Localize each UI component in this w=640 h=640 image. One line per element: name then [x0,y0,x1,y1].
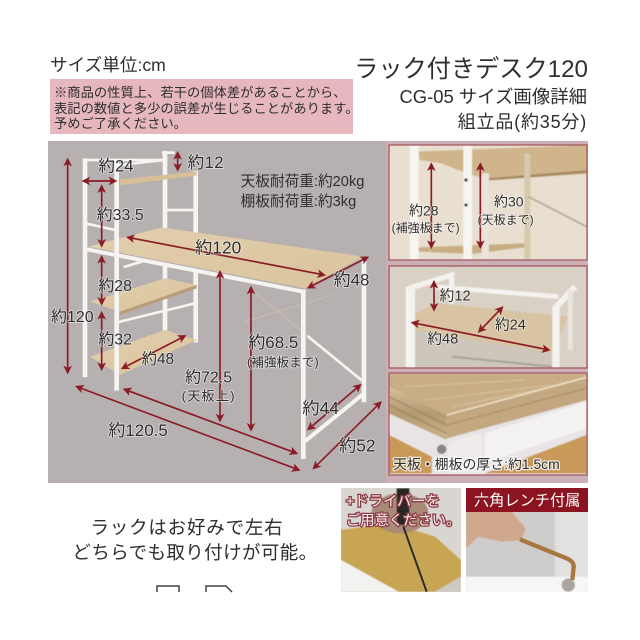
note text: ご用意ください。 [346,512,460,529]
dimension labels: (補強板まで) [247,356,319,370]
rack mounting caption: ラックはお好みで左右 [90,517,284,538]
dimension labels: 約44 [302,398,339,418]
assembly note: 組立品(約35分) [458,112,587,132]
photo: screwdriver note [341,488,461,592]
dimension labels: 約52 [339,435,376,455]
photo: hex wrench [466,488,588,593]
note text: +ドライバーを [346,493,440,510]
dimension labels: 約120.5 [108,421,168,440]
dimension labels: 約48 [142,351,174,368]
labels: 約30 [494,194,524,210]
rack mounting caption [72,517,318,563]
arrows [431,164,480,247]
main desk diagram [51,153,381,470]
labels: (天板まで) [478,213,534,227]
labels [392,194,534,235]
labels: (補強板まで) [392,221,460,235]
note text [346,493,460,529]
size unit label: サイズ単位:cm [50,55,166,75]
notice box: 表記の数値と多少の誤差が生じることがあります。 [54,101,358,116]
thickness caption: 天板・棚板の厚さ:約1.5cm [393,456,560,472]
right pink background [386,141,588,483]
dimension labels: 約24 [98,157,134,176]
dimension arrows [68,153,381,470]
dimension labels: 約72.5 [185,369,232,387]
labels [427,288,526,347]
dimension labels: 約120 [195,237,241,257]
load capacity text: 天板耐荷重:約20kg [241,173,364,190]
load capacity text [241,173,364,210]
product title: ラック付きデスク120 [354,56,588,83]
accessory banner: 六角レンチ付属 [474,492,580,510]
dimension labels: 約33.5 [97,206,144,224]
detail photo: rack height [389,145,587,260]
arrows [412,282,549,350]
labels: 約28 [409,202,439,218]
notice box: ※商品の性質上、若干の個体差があることから、 [54,85,347,100]
dimension labels: 約120 [51,308,94,326]
main gray background panel [48,141,588,483]
desk illustration [85,153,364,457]
dimension labels: 約28 [98,277,132,295]
detail photo: shelf dimensions [389,266,587,368]
notice box: 予めご了承ください。 [54,116,187,131]
small rack icons cropped at the bottom [157,586,232,592]
rack mounting caption: どちらでも取り付けが可能。 [72,542,318,563]
dimension labels: 約68.5 [248,333,298,352]
labels: 約12 [440,288,471,305]
dimension labels: 約32 [98,330,132,348]
dimension labels: 約12 [188,153,224,172]
panel outlines [389,145,587,475]
dimension labels: (天板上) [182,389,236,404]
notice box [50,79,358,134]
model subtitle: CG-05 サイズ画像詳細 [400,86,587,107]
load capacity text: 棚板耐荷重:約3kg [241,193,356,210]
dimension labels: 約48 [334,270,370,289]
detail photo: board thickness [389,373,587,475]
labels: 約48 [427,330,458,347]
dimension labels [51,153,376,455]
labels: 約24 [495,316,526,333]
